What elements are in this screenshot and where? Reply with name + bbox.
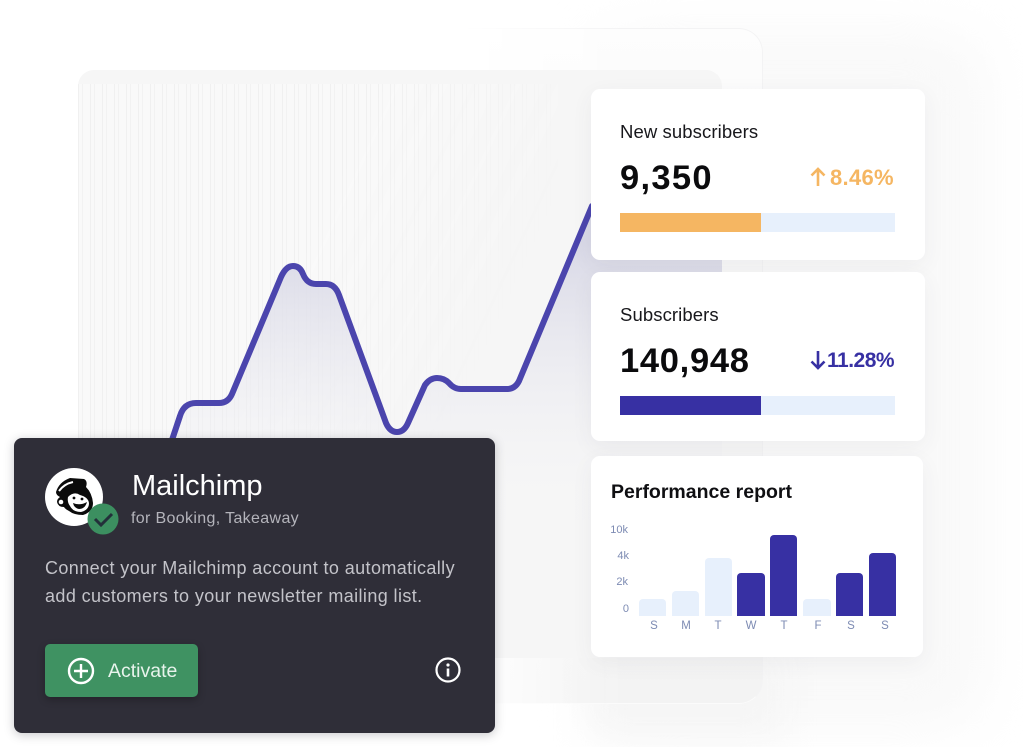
- day labels: T: [780, 620, 788, 632]
- day labels: W: [746, 620, 756, 632]
- button label: Activate: [108, 660, 177, 682]
- soft shadow below panel: [590, 650, 780, 735]
- progress fill: [620, 396, 761, 415]
- dark panel: Mailchimp integration: [14, 438, 495, 733]
- description: add customers to your newsletter mailing list.: [45, 586, 423, 606]
- description: Connect your Mailchimp account to automatically: [45, 558, 455, 578]
- outlined back panel: [577, 28, 758, 38]
- bar chart: [610, 524, 896, 632]
- card: subscribers: [591, 272, 925, 441]
- icon: verified check: [88, 504, 118, 534]
- label: Subscribers: [620, 304, 719, 325]
- day labels: M: [681, 620, 691, 632]
- change percent: 11.28%: [827, 349, 894, 372]
- day labels: S: [881, 620, 889, 632]
- shaded area under curve: [172, 208, 722, 520]
- icon: Mailchimp logo: [45, 468, 103, 526]
- icon: plus: [68, 658, 94, 684]
- soft background glow: [590, 30, 990, 730]
- title: Mailchimp: [132, 470, 263, 502]
- y axis labels: 2k: [616, 576, 628, 588]
- day labels: T: [714, 620, 722, 632]
- heading: Performance report: [611, 481, 792, 503]
- y axis labels: 4k: [617, 550, 629, 562]
- change percent: 8.46%: [830, 165, 894, 190]
- card: new subscribers: [591, 89, 925, 260]
- label: New subscribers: [620, 121, 758, 142]
- progress bar: [620, 396, 895, 415]
- icon: down arrow: [810, 351, 826, 370]
- subtitle: for Booking, Takeaway: [131, 510, 299, 527]
- card: performance report: [591, 456, 923, 657]
- progress bar: [620, 213, 895, 232]
- bars: [639, 535, 896, 616]
- day labels: S: [847, 620, 855, 632]
- value: 9,350: [620, 159, 713, 197]
- y axis labels: 10k: [610, 524, 628, 536]
- icon: up arrow: [810, 167, 826, 186]
- day labels: F: [814, 620, 822, 632]
- grey chart panel: [78, 70, 551, 438]
- description: [45, 558, 455, 606]
- progress fill: [620, 213, 761, 232]
- button: activate: [45, 644, 198, 697]
- day labels: [650, 620, 889, 632]
- vertical stripe texture: [78, 84, 558, 658]
- y axis labels: [610, 524, 629, 615]
- day labels: S: [650, 620, 658, 632]
- value: 140,948: [620, 342, 750, 380]
- purple trend line: [172, 206, 592, 440]
- icon: info: [435, 657, 461, 683]
- y axis labels: 0: [623, 603, 629, 615]
